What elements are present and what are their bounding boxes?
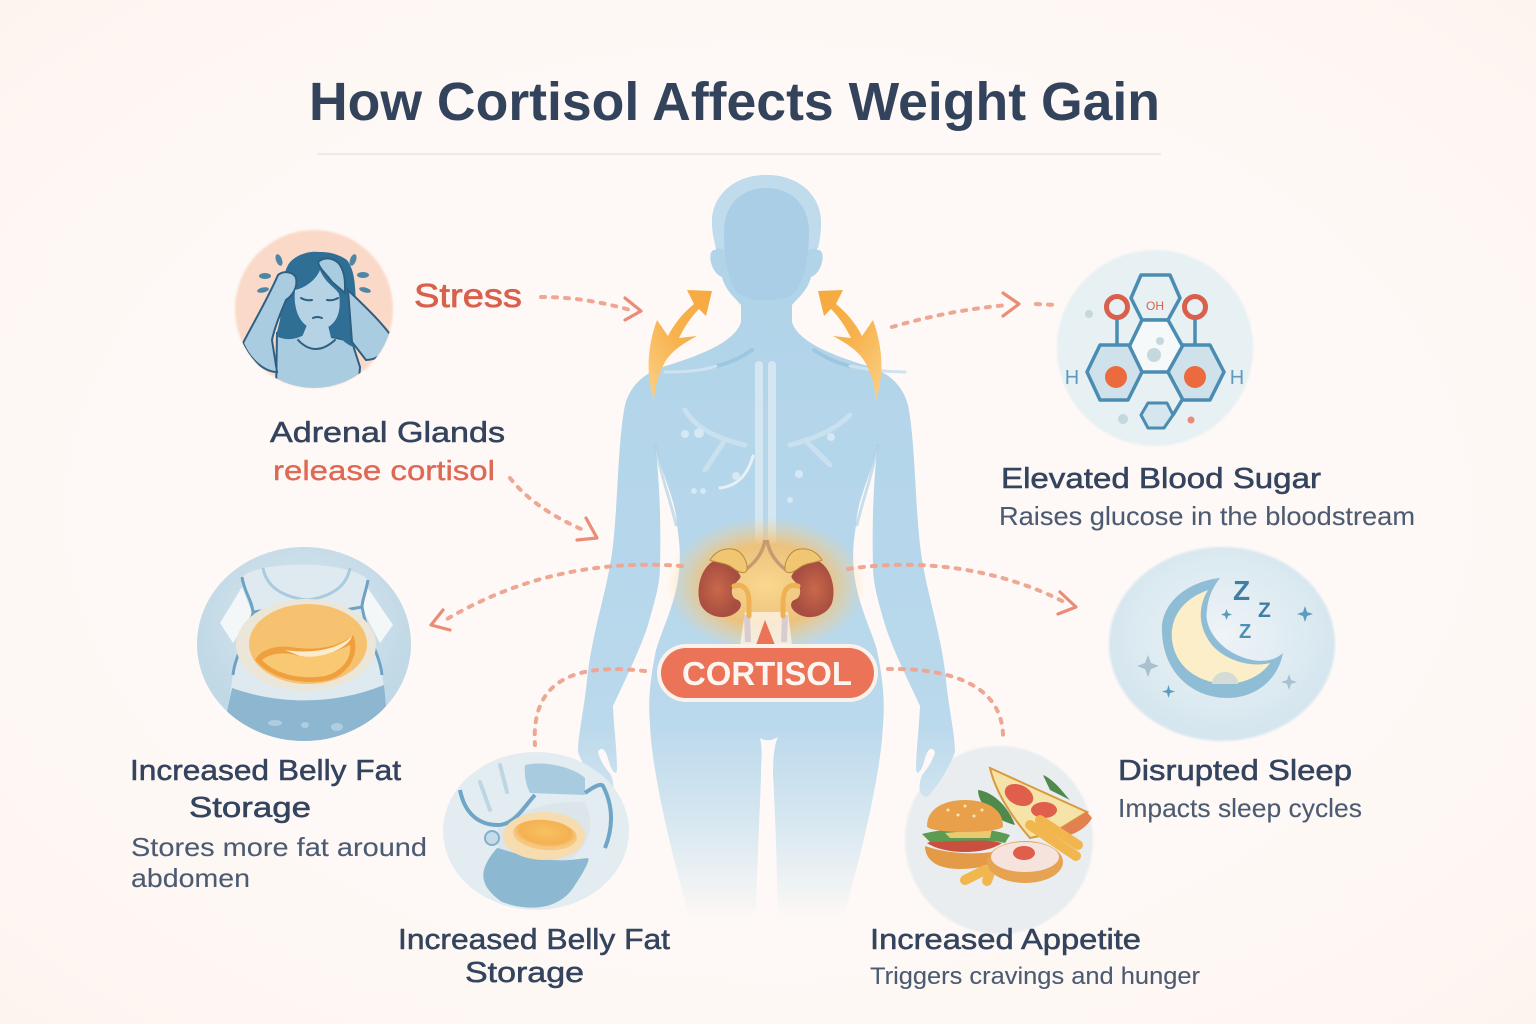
icon: moon and sleep: [1109, 547, 1335, 741]
belly fat blob: [249, 604, 367, 684]
hair: [276, 252, 364, 347]
left arm: [243, 272, 296, 372]
disrupted sleep text: [1118, 755, 1362, 823]
increased appetite text: Triggers cravings and hunger: [870, 963, 1200, 990]
arrow: body to blood sugar: [892, 293, 1056, 327]
right orange arrow: [818, 290, 881, 400]
arrow: cortisol to appetite: [888, 669, 1003, 740]
icon: moon and sleep: Z: [1233, 575, 1250, 606]
side swoosh and small joint: [485, 831, 499, 845]
left orange arrow: [649, 290, 712, 400]
arrow: cortisol to abdomen: [535, 669, 645, 745]
second belly fat text: [398, 924, 670, 989]
increased appetite text: [870, 924, 1200, 990]
disrupted sleep text: Impacts sleep cycles: [1118, 793, 1362, 823]
neck and face: [300, 326, 332, 348]
hips: [483, 848, 588, 908]
icon: moon and sleep: Z: [1258, 599, 1271, 622]
waist outlines: [233, 577, 382, 675]
arrow: stress to body: [541, 297, 641, 320]
pizza slice: [990, 768, 1087, 838]
cortisol badge: [657, 644, 878, 702]
fries: [965, 820, 1078, 881]
icon: blood sugar molecule: OH: [1146, 299, 1164, 313]
belly fat storage text: Storage: [189, 792, 311, 824]
icon: blood sugar molecule: H: [1065, 367, 1079, 389]
cortisol badge: CORTISOL: [682, 655, 852, 692]
belly fat storage text: [130, 755, 427, 893]
elevated blood sugar text: [999, 463, 1415, 531]
down arrows: [480, 765, 507, 810]
bottom hexagon: [1141, 403, 1173, 428]
right kidney: [791, 562, 834, 617]
belly: [498, 848, 570, 860]
adrenal glands label: Adrenal Glands: [270, 417, 505, 449]
increased appetite text: Increased Appetite: [870, 924, 1141, 956]
stress marks: [257, 253, 371, 294]
stars: [1137, 655, 1297, 690]
lower clothing: [227, 685, 386, 741]
round pizza bun: [987, 841, 1063, 883]
arrow: kidneys to sleep: [848, 565, 1076, 614]
shoulder and chest details: [655, 350, 905, 540]
left kidney: [698, 562, 741, 617]
icon: stressed woman: [235, 230, 393, 395]
leaves: [978, 775, 1070, 825]
belly fat storage text: Increased Belly Fat: [130, 755, 401, 787]
icon: fast food: [922, 768, 1092, 883]
stress label: Stress: [414, 277, 522, 314]
gap between the legs: [756, 737, 778, 922]
arrow: adrenal label to kidneys: [510, 478, 597, 540]
cortisol pointer triangle: [756, 620, 775, 645]
ureters and tubes: [745, 540, 786, 570]
belly fat storage text: abdomen: [131, 863, 250, 893]
adrenal glands label: release cortisol: [273, 455, 495, 486]
elevated blood sugar text: Elevated Blood Sugar: [1001, 463, 1321, 495]
right arm: [348, 290, 392, 360]
arrow: kidneys to belly fat: [431, 565, 682, 630]
icon: blood sugar molecule: [1057, 250, 1253, 446]
gaps between arms and waist: [220, 587, 393, 643]
icon: belly fat: [197, 547, 411, 745]
middle hexagon: [1129, 320, 1183, 372]
right hexagon: [1168, 345, 1224, 400]
second belly fat text: Increased Belly Fat: [398, 924, 670, 956]
second belly fat text: Storage: [465, 957, 584, 989]
collar and facial features: [298, 298, 338, 349]
belly fat storage text: Stores more fat around: [131, 832, 427, 862]
title: How Cortisol Affects Weight Gain: [309, 72, 1160, 132]
hand on head: [318, 258, 345, 293]
top hexagon: [1131, 275, 1180, 320]
right adrenal gland: [785, 549, 822, 573]
burger: [925, 846, 1000, 869]
neckline: [263, 568, 350, 600]
contour lines: [460, 785, 611, 848]
icon: belly side view: [443, 752, 629, 910]
human body silhouette: [578, 175, 955, 922]
dark stars: [1162, 606, 1313, 698]
left hexagon: [1087, 345, 1142, 400]
belly fat: [512, 817, 578, 853]
upper torso: [525, 763, 585, 795]
renal pelvis: [734, 585, 798, 616]
inner head: [724, 188, 809, 300]
icon: blood sugar molecule: H: [1230, 367, 1244, 389]
chest speckles: [681, 428, 835, 503]
disrupted sleep text: Disrupted Sleep: [1118, 755, 1352, 787]
icon: moon and sleep: Z: [1239, 621, 1251, 643]
left adrenal gland: [710, 549, 747, 573]
kidneys and adrenal glands: [666, 517, 866, 653]
plate behind the food, under the right hand: [905, 746, 1093, 934]
torso: [228, 565, 387, 710]
elevated blood sugar text: Raises glucose in the bloodstream: [999, 501, 1415, 531]
adrenal glands label: [270, 417, 505, 486]
pale hair rim of the head: [712, 175, 821, 250]
torso: [276, 333, 360, 395]
pale halo around the fat: [236, 599, 376, 691]
belly fat halo: [503, 812, 585, 860]
